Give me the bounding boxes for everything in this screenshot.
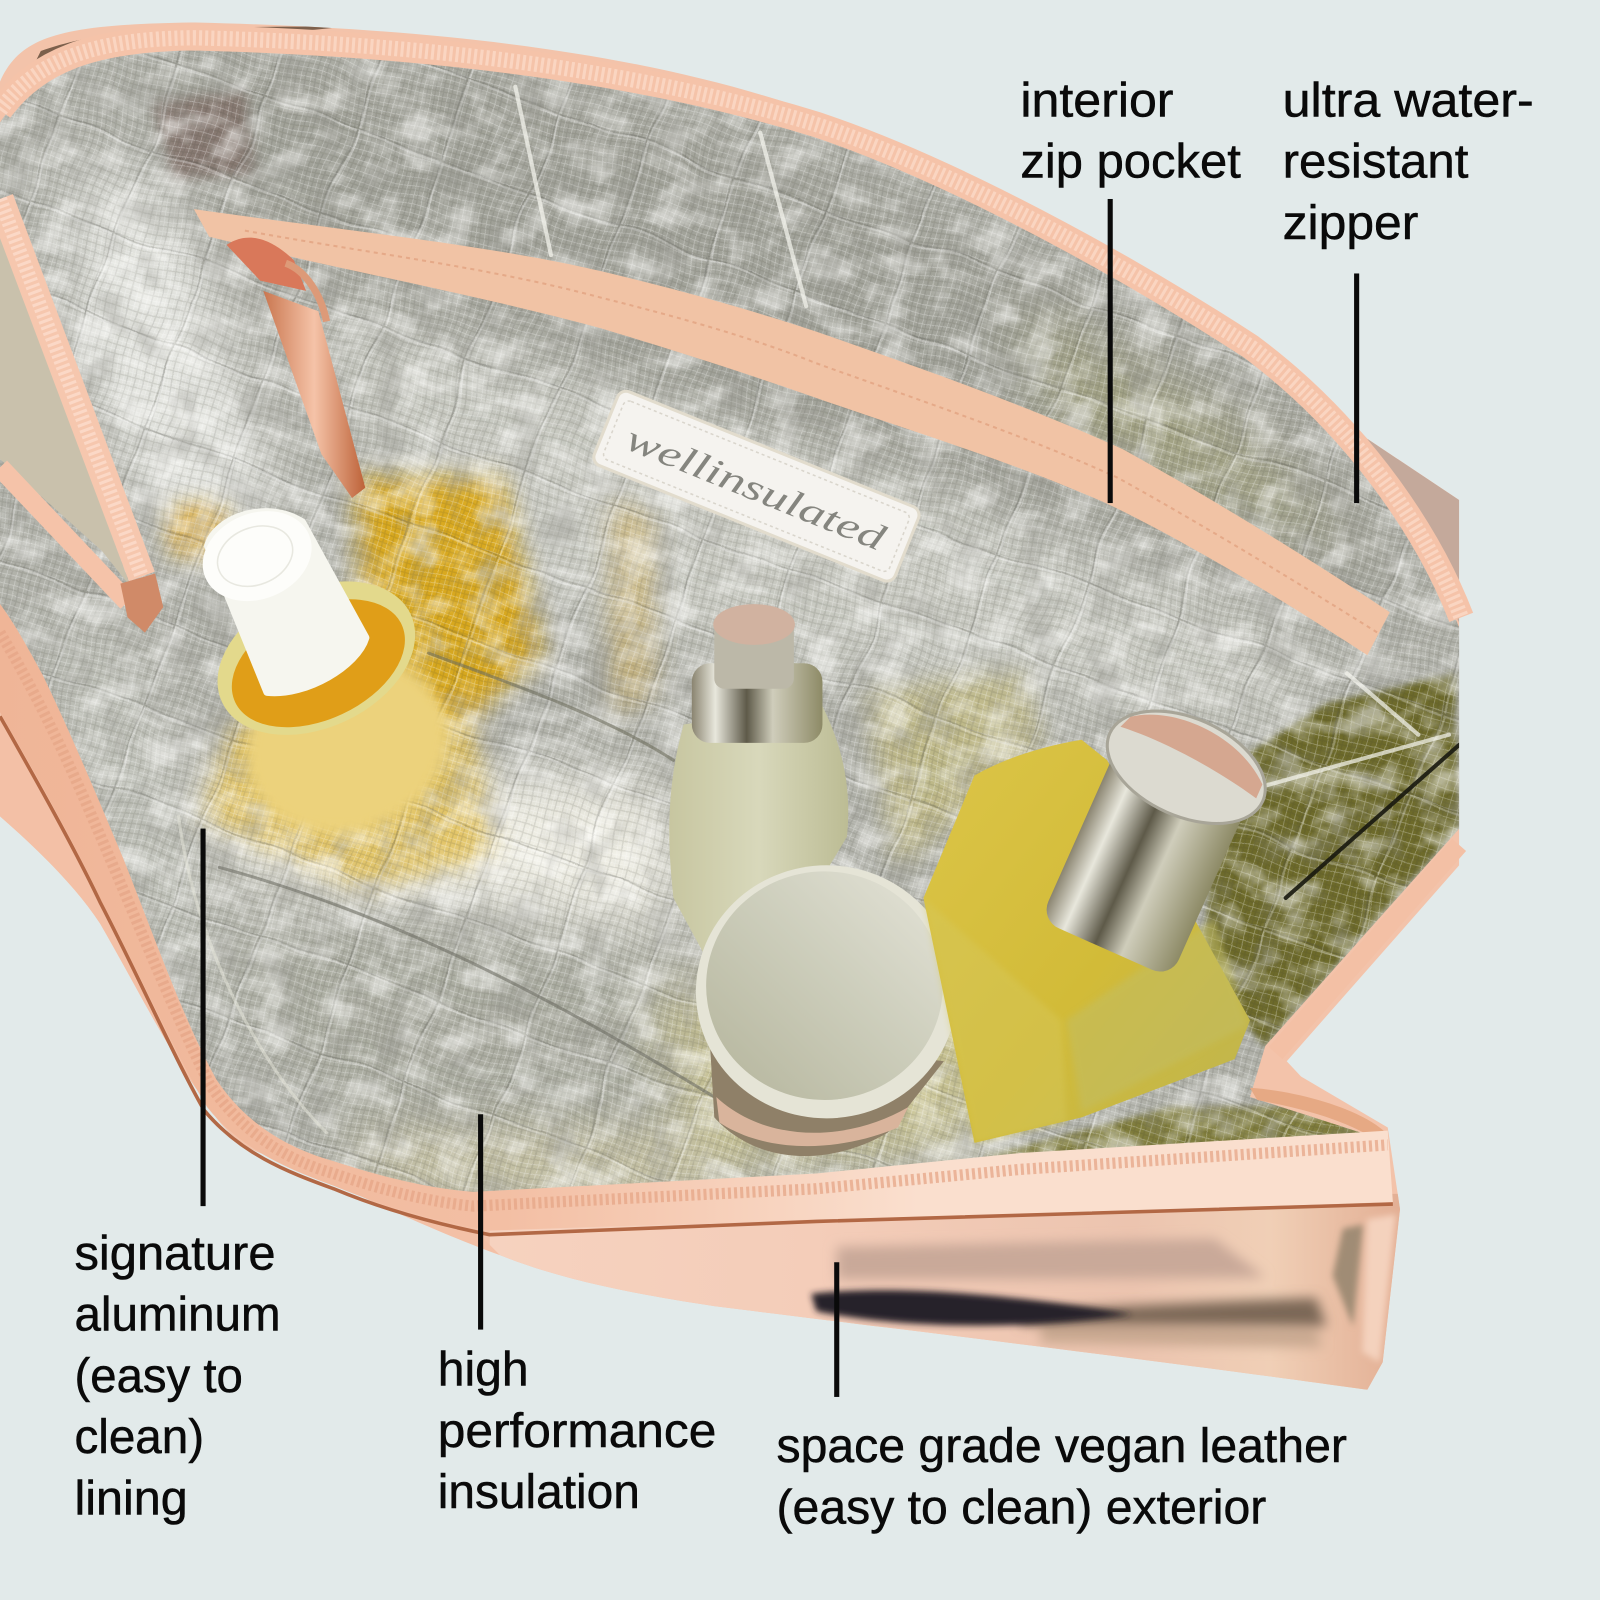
callout: signature aluminum lining (74, 829, 281, 1525)
label text (1283, 74, 1534, 250)
label text: aluminum (74, 1289, 281, 1342)
oil bottle (189, 495, 472, 860)
interior pocket zipper (194, 209, 1390, 655)
callout: interior zip pocket (1020, 74, 1241, 503)
label text: performance (438, 1405, 716, 1458)
main zipper top edge (0, 38, 1461, 617)
leader line (478, 1114, 483, 1330)
inner flap rim (1250, 1088, 1388, 1135)
label text: ultra water- (1283, 74, 1534, 127)
label script text: wellinsulated (620, 417, 892, 559)
bag photo (0, 22, 1473, 1390)
label text: (easy to clean) exterior (777, 1481, 1266, 1534)
bottle cap white (208, 512, 365, 692)
label text: clean) (74, 1411, 204, 1464)
label text: zip pocket (1020, 136, 1241, 189)
jar with metal lid (696, 865, 957, 1156)
label text: lining (74, 1472, 188, 1525)
label text: interior (1020, 74, 1174, 127)
main zipper right edge (1276, 845, 1459, 1053)
spray bottle (669, 604, 848, 954)
label text (1020, 74, 1241, 189)
left side flap (0, 199, 163, 633)
callout: water-resistant zipper (1283, 74, 1534, 503)
label text (438, 1344, 716, 1519)
warm product reflections (173, 480, 1041, 888)
glass cube bottle (923, 688, 1283, 1143)
callout: vegan leather exterior (777, 1262, 1347, 1534)
leader line (1108, 199, 1113, 503)
label text: insulation (438, 1466, 640, 1519)
label text: (easy to (74, 1350, 243, 1403)
label text: space grade vegan leather (777, 1420, 1347, 1473)
leader line (201, 829, 206, 1206)
soft lighting and reflections (41, 61, 1408, 1189)
rose reflection in the corner (153, 92, 255, 179)
zipper pull (227, 238, 365, 498)
label text: zipper (1283, 197, 1418, 250)
label text (777, 1420, 1347, 1534)
leader line (1354, 273, 1359, 503)
foil texture (0, 50, 1459, 1192)
label text: signature (74, 1227, 276, 1280)
bag exterior rose gold shell (0, 22, 1460, 1390)
brand label (591, 388, 922, 584)
foil creases (179, 87, 1459, 1133)
callout: high performance insulation (438, 1114, 716, 1519)
label text: high (438, 1344, 529, 1397)
olive side wall (1204, 673, 1459, 1046)
foil lining (0, 50, 1460, 1192)
leader line (834, 1262, 839, 1397)
cube bottle silver cap (1029, 688, 1283, 983)
main zipper bottom edge (0, 604, 1393, 1235)
label text (74, 1227, 281, 1525)
label text: resistant (1283, 136, 1468, 189)
